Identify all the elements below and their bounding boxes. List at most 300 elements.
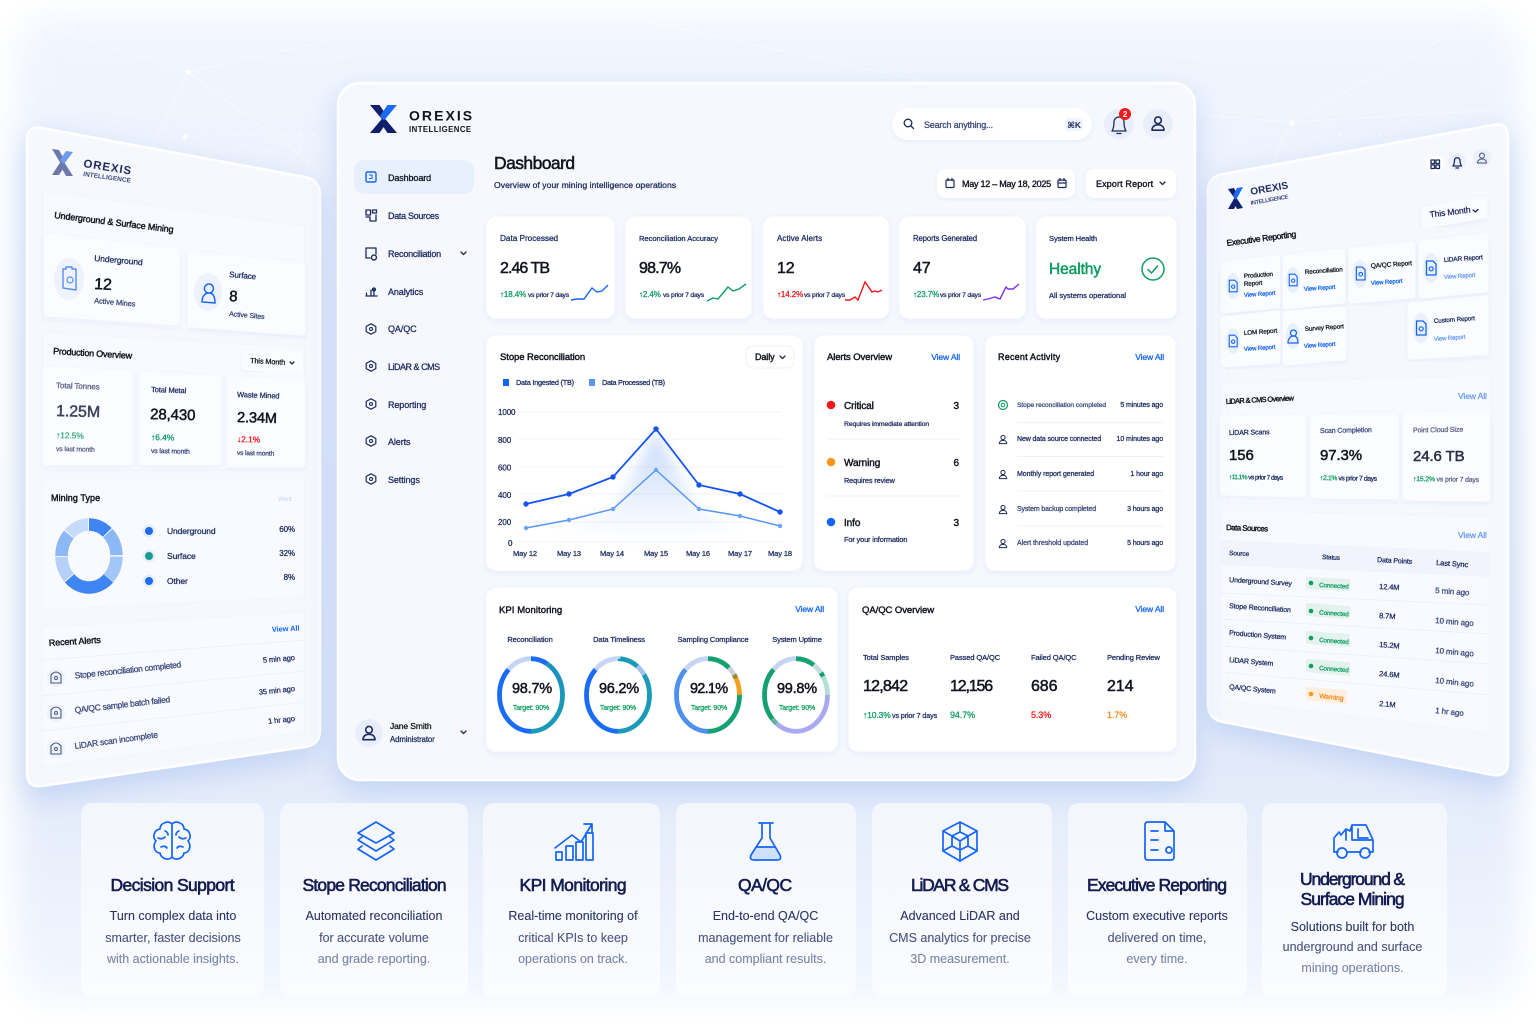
row: lidar system: 24.6M (1379, 669, 1400, 680)
logo (370, 105, 472, 134)
stat: lidar scans: ↑11.1% vs prior 7 days (1229, 474, 1284, 482)
row: lidar system (1229, 657, 1475, 689)
row: lidar system: Connected (1319, 665, 1349, 674)
feature card: executive reporting: delivered on time, (1108, 931, 1206, 945)
chart card: stope reconciliation: Stope Reconciliation (500, 352, 585, 363)
activity row: Alert threshold updated (1017, 540, 1088, 547)
alert: info: Info (844, 518, 861, 529)
stat: point cloud size (1406, 414, 1487, 498)
metric: pending: Pending Review (1107, 653, 1160, 662)
nav: reporting (366, 399, 426, 410)
report card: production: Report (1244, 280, 1263, 288)
section: lidar and cms overview: LiDAR & CMS Overview (1226, 393, 1295, 406)
x axis labels (513, 549, 792, 558)
report card: qa/qc: View Report (1371, 279, 1403, 287)
table header (1220, 540, 1490, 577)
stat: total tonnes: 1.25M (56, 403, 100, 421)
row: qa/qc system: 1 hr ago (1435, 706, 1465, 718)
card: underground: 12 (94, 276, 112, 294)
card: qa/qc overview: QA/QC Overview (862, 605, 934, 616)
feature card: executive reporting: Executive Reporting (1087, 875, 1227, 895)
stat: waste mined: Waste Mined (237, 390, 280, 400)
kpi card: data processed: vs prior 7 days (528, 292, 570, 299)
card: underground (47, 237, 176, 322)
table header: Data Points (1377, 557, 1413, 566)
activity row (999, 470, 1163, 479)
row: underground survey (1229, 577, 1470, 597)
metric: failed: 686 (1031, 678, 1058, 695)
row: underground survey: Underground Survey (1229, 577, 1293, 588)
alert row: qa/qc sample (47, 684, 295, 722)
feature card: qa/qc: QA/QC (738, 875, 792, 895)
report card: lidar (1422, 237, 1485, 295)
alert row: lidar scan: LiDAR scan incomplete (74, 729, 159, 751)
nav: dashboard active (354, 160, 474, 194)
right logo (1228, 180, 1289, 209)
ring: sampling compliance: Target: 90% (691, 705, 727, 712)
report card: reconciliation (1286, 252, 1343, 306)
feature card: underground and surface mining: underground and surface (1283, 940, 1422, 954)
stat: waste mined: vs last month (237, 450, 275, 458)
table header: Last Sync (1436, 558, 1469, 569)
feature card: kpi monitoring: critical KPIs to keep (518, 931, 628, 945)
icon: layers (358, 822, 394, 860)
right logo: OREXIS (1250, 180, 1289, 198)
feature card: lidar and cms: 3D measurement. (910, 952, 1010, 966)
row: underground survey: Connected (1319, 582, 1349, 591)
row: production system: 15.2M (1379, 640, 1400, 651)
kpi card: system health (1036, 216, 1177, 319)
card: underground: Active Mines (94, 296, 136, 309)
alert row: stope reconciliation: Stope reconciliation completed (74, 659, 182, 680)
nav: data sources: Data Sources (388, 211, 440, 221)
ring: reconciliation (500, 635, 562, 731)
line: data processed (524, 468, 782, 530)
kpi card: reconciliation accuracy (625, 216, 752, 319)
x axis labels: May 17 (728, 549, 752, 558)
ring: data timeliness (586, 635, 650, 731)
section: production overview: Production Overview (53, 346, 133, 361)
feature card: underground and surface mining: mining operations. (1301, 961, 1404, 975)
activity row (999, 435, 1163, 444)
activity row: 1 hour ago (1131, 471, 1163, 478)
alert: info: 3 (954, 518, 960, 529)
kpi card: data processed: Data Processed (500, 234, 559, 243)
search bar (892, 108, 1092, 140)
activity row: 5 minutes ago (1120, 402, 1163, 409)
alert: critical: Critical (844, 401, 874, 412)
kpi card: reports generated: vs prior 7 days (940, 292, 982, 299)
search bar: ⌘K (1067, 120, 1082, 130)
nav: reconciliation: Reconciliation (388, 249, 441, 259)
report card: qa/qc: QA/QC Report (1371, 260, 1412, 270)
feature card: qa/qc: and compliant results. (705, 952, 826, 966)
nav: reporting: Reporting (388, 400, 426, 410)
card: qa/qc overview (848, 587, 1177, 752)
metric: passed: Passed QA/QC (950, 653, 1001, 662)
feature card: stope reconciliation: Stope Reconciliation (302, 875, 446, 895)
row: production system: Connected (1319, 637, 1349, 646)
metric: total samples: 12,842 (863, 678, 908, 695)
row: stope reconciliation: Connected (1319, 610, 1349, 618)
alert: warning: Warning (844, 458, 880, 469)
x axis labels: May 15 (644, 549, 668, 558)
row: underground survey: 5 min ago (1435, 586, 1470, 597)
truck wheels (1337, 848, 1370, 858)
section: data sources table: Data Sources (1226, 523, 1268, 533)
ring: reconciliation: Reconciliation (507, 635, 553, 644)
notification bell (1104, 108, 1134, 139)
table header: Source (1229, 550, 1250, 558)
kpi card: active alerts: vs prior 7 days (804, 292, 846, 299)
feature card: qa/qc: management for reliable (698, 931, 833, 945)
metric: passed: 94.7% (950, 710, 975, 720)
nav: reconciliation (366, 248, 466, 260)
kpi card: data processed: ↑18.4% (500, 290, 526, 299)
ring: data timeliness: 96.2% (599, 681, 639, 697)
alert row: qa/qc sample: QA/QC sample batch failed (74, 694, 171, 715)
activity row: Stope reconciliation completed (1017, 402, 1106, 409)
y axis: 600 (498, 464, 512, 472)
card: kpi monitoring: KPI Monitoring (499, 605, 562, 616)
row: qa/qc system: 2.1M (1379, 699, 1396, 709)
feature card: lidar and cms: LiDAR & CMS (911, 875, 1009, 895)
row: qa/qc system (1229, 684, 1465, 718)
section: lidar and cms overview (1220, 375, 1491, 503)
feature card: underground and surface mining: Surface Mining (1300, 889, 1404, 909)
stat: scan completion (1314, 416, 1395, 496)
row: underground survey: 12.4M (1379, 582, 1400, 592)
icon: flask (750, 823, 781, 860)
alert row: lidar scan: 1 hr ago (268, 714, 295, 726)
alert: warning: 6 (954, 458, 960, 469)
row: lidar system: 10 min ago (1435, 676, 1475, 689)
subtitle: Overview of your mining intelligence operations (494, 180, 676, 190)
row: qa/qc system: QA/QC System (1229, 684, 1276, 695)
section: mining type: Went (278, 497, 292, 503)
stat: point cloud size: Point Cloud Size (1413, 427, 1463, 434)
report card: lom (1224, 314, 1278, 364)
kpi card: reports generated: ↑23.7% (913, 290, 939, 299)
kpi card: reconciliation accuracy: 98.7% (639, 260, 681, 277)
feature card: lidar and cms: Advanced LiDAR and (900, 909, 1020, 923)
row: stope reconciliation: 10 min ago (1435, 616, 1475, 628)
kpi card: data processed: 2.46 TB (500, 260, 550, 277)
daily dropdown (746, 346, 794, 368)
background network decoration (60, 20, 1500, 170)
left logo: INTELLIGENCE (83, 171, 132, 185)
activity row: Monthly report generated (1017, 471, 1094, 478)
logo: INTELLIGENCE (409, 125, 471, 134)
feature card: qa/qc: End-to-end QA/QC (713, 909, 818, 923)
activity row (999, 539, 1163, 548)
kpi card: reconciliation accuracy: Reconciliation Accuracy (639, 234, 718, 243)
report card: custom (1411, 299, 1485, 356)
row: production system (1229, 630, 1475, 658)
table header: Status (1322, 554, 1341, 562)
nav: settings (366, 474, 420, 485)
kpi card: active alerts (763, 216, 889, 319)
legend: surface (142, 549, 295, 562)
legend: other (142, 573, 295, 588)
card: kpi monitoring (486, 587, 838, 752)
this month dropdown (1425, 200, 1484, 225)
y axis: 0 (508, 539, 513, 548)
heading: executive reporting: Executive Reporting (1226, 229, 1297, 248)
icon: mining truck (1334, 825, 1373, 852)
stat: point cloud size: ↑15.2% vs prior 7 days (1413, 476, 1480, 484)
row: stope reconciliation (1229, 603, 1475, 628)
stat: total tonnes: Total Tonnes (56, 381, 100, 392)
report card: reconciliation: View Report (1304, 285, 1336, 293)
nav: qa/qc (366, 324, 417, 334)
top icons (1426, 149, 1491, 173)
kpi card: system health: Healthy (1049, 261, 1101, 278)
feature card: stope reconciliation (280, 803, 468, 998)
report card: lidar: View Report (1444, 273, 1476, 281)
report card: survey (1286, 310, 1344, 362)
card: surface: 8 (229, 288, 238, 305)
chart card: stope reconciliation (486, 335, 803, 571)
report card: custom: Custom Report (1434, 315, 1475, 325)
legend: Data Processed (TB) (602, 378, 665, 387)
section: lidar and cms overview: View All (1458, 391, 1487, 401)
alert row: qa/qc sample: 35 min ago (258, 684, 295, 697)
stat: total metal (142, 375, 218, 462)
activity row: 3 hours ago (1127, 506, 1163, 513)
feature card: stope reconciliation: for accurate volume (319, 931, 429, 945)
stat: scan completion: Scan Completion (1320, 427, 1372, 435)
metric: failed: Failed QA/QC (1031, 653, 1077, 662)
nav: lidar and cms (366, 361, 440, 372)
date range: May 12 – May 18, 2025 (962, 179, 1051, 189)
report card: production: View Report (1244, 291, 1276, 299)
stat: total metal: 28,430 (150, 406, 196, 424)
stat: scan completion: 97.3% (1320, 447, 1362, 464)
feature card: kpi monitoring (483, 803, 660, 998)
feature card: kpi monitoring: KPI Monitoring (520, 875, 626, 895)
stat: waste mined: ↓2.1% (237, 434, 261, 445)
legend: Data Ingested (TB) (516, 378, 574, 387)
metric: total samples: ↑10.3% (863, 710, 891, 720)
report card: lom: LOM Report (1244, 328, 1278, 337)
legend: surface: 32% (279, 549, 295, 558)
legend: surface: Surface (167, 551, 196, 561)
icon: bar chart with arrow (555, 824, 593, 860)
row: lidar system: LiDAR System (1229, 657, 1274, 668)
nav: analytics: Analytics (388, 287, 424, 297)
stat: waste mined (230, 380, 302, 464)
card: surface: Active Sites (229, 311, 265, 321)
metric: pending: 1.7% (1107, 710, 1127, 720)
legend: underground: 60% (279, 525, 295, 534)
legend: underground: Underground (167, 526, 216, 536)
report card: production: Production (1244, 271, 1274, 280)
y axis (498, 408, 516, 548)
activity row: System backup completed (1017, 506, 1096, 513)
report card: survey: Survey Report (1305, 323, 1344, 333)
report card: custom: View Report (1434, 335, 1466, 343)
donut chart (62, 524, 116, 588)
user profile: Jane Smith (390, 721, 432, 731)
this month dropdown: This Month (1429, 205, 1471, 219)
row: production system: 10 min ago (1435, 646, 1475, 658)
icon: wireframe cube (943, 822, 977, 861)
x axis labels: May 12 (513, 549, 537, 558)
section: production overview (43, 332, 305, 470)
section: underground and surface mining (43, 191, 305, 337)
left logo (52, 149, 132, 185)
panel: left mining overview (27, 128, 320, 786)
panel: right reporting (1208, 124, 1508, 775)
date range (937, 169, 1075, 198)
feature card: decision support: with actionable insights. (106, 952, 239, 966)
ring: system uptime: System Uptime (772, 635, 822, 644)
report card: lidar: LiDAR Report (1444, 254, 1483, 264)
feature card: lidar and cms (872, 803, 1052, 998)
feature card: decision support: Turn complex data into (110, 909, 236, 923)
x axis labels: May 14 (600, 549, 624, 558)
kpi card: active alerts: ↑14.2% (777, 290, 803, 299)
activity row: 10 minutes ago (1117, 436, 1163, 443)
legend: other: 8% (284, 573, 295, 582)
card: qa/qc overview: View All (1135, 604, 1164, 614)
activity row (998, 400, 1163, 410)
legend (503, 378, 665, 387)
section: recent alerts: View All (272, 624, 300, 634)
alert: info (827, 518, 960, 544)
stat: lidar scans (1223, 418, 1302, 494)
feature card: decision support: Decision Support (110, 875, 235, 895)
report card: reconciliation: Reconciliation (1305, 266, 1343, 276)
section: recent alerts (42, 612, 305, 767)
metric: pending (1107, 653, 1160, 720)
ring: data timeliness: Data Timeliness (593, 635, 645, 644)
right logo: INTELLIGENCE (1250, 194, 1289, 207)
nav: lidar and cms: LiDAR & CMS (388, 362, 440, 372)
feature card: executive reporting: Custom executive reports (1086, 909, 1228, 923)
section: mining type: Mining Type (51, 493, 100, 503)
metric: pending: 214 (1107, 678, 1134, 695)
nav: qa/qc: QA/QC (388, 324, 417, 334)
x axis labels: May 18 (768, 549, 792, 558)
feature card: decision support (81, 803, 264, 998)
nav: alerts (366, 436, 411, 447)
feature card: decision support: smarter, faster decisions (105, 931, 241, 945)
metric: total samples (863, 653, 938, 720)
kpi card: system health: System Health (1049, 234, 1097, 243)
kpi card: active alerts: Active Alerts (777, 234, 822, 243)
metric: passed: 12,156 (950, 678, 993, 695)
card: recent activity: Recent Activity (998, 352, 1061, 362)
alert: warning: Requires review (844, 476, 896, 485)
stat: scan completion: ↑2.1% vs prior 7 days (1320, 475, 1378, 483)
section: underground and surface mining: Underground & Surface Mining (54, 210, 174, 235)
kpi card: reconciliation accuracy: ↑2.4% (639, 290, 661, 299)
nav: data sources (366, 210, 440, 221)
nav: alerts: Alerts (388, 437, 411, 447)
feature card: stope reconciliation: Automated reconciliation (306, 909, 442, 923)
feature card: lidar and cms: CMS analytics for precise (889, 931, 1031, 945)
feature card: executive reporting: every time. (1126, 952, 1188, 966)
feature card: underground and surface mining: Solutions built for both (1291, 920, 1414, 934)
ring: data timeliness: Target: 90% (600, 705, 636, 712)
kpi card: reconciliation accuracy: vs prior 7 days (663, 292, 705, 299)
daily dropdown: Daily (755, 352, 775, 362)
alert: critical (827, 401, 960, 428)
row: stope reconciliation: Stope Reconciliation (1229, 603, 1291, 614)
section: data sources table: View All (1458, 530, 1487, 540)
feature card: underground and surface mining (1262, 803, 1447, 998)
panel: main dashboard (338, 83, 1195, 780)
metric: failed: 5.3% (1031, 710, 1051, 720)
stat: point cloud size: 24.6 TB (1413, 448, 1465, 465)
nav: dashboard active: Dashboard (388, 173, 431, 183)
alert row: stope reconciliation (47, 653, 295, 687)
y axis: 800 (498, 436, 512, 445)
ring: sampling compliance: 92.1% (690, 681, 728, 697)
y axis: 200 (498, 518, 512, 527)
feature card: kpi monitoring: Real-time monitoring of (508, 909, 638, 923)
line: data ingested (523, 426, 783, 515)
left logo: OREXIS (83, 158, 132, 178)
legend: underground (142, 524, 295, 538)
ring: reconciliation: Target: 90% (513, 705, 549, 712)
sidebar navigation (354, 160, 474, 485)
notification bell: 2 (1123, 110, 1128, 119)
stat: lidar scans: 156 (1229, 447, 1254, 464)
row: stope reconciliation: 8.7M (1379, 611, 1396, 621)
ring: sampling compliance: Sampling Compliance (677, 635, 749, 644)
kpi card: reports generated: Reports Generated (913, 234, 977, 243)
logo: OREXIS (409, 108, 472, 124)
section: data sources table (1220, 510, 1490, 733)
kpi card: active alerts: 12 (777, 260, 795, 277)
alert row: stope reconciliation: 5 min ago (262, 653, 295, 665)
search bar: Search anything... (924, 120, 993, 130)
metric: total samples: Total Samples (863, 653, 909, 662)
user profile (355, 719, 466, 747)
icon: report document (1145, 822, 1174, 860)
user profile: Administrator (390, 735, 435, 744)
alert: warning (827, 458, 960, 485)
stat: waste mined: 2.34M (237, 410, 277, 427)
activity row: 5 hours ago (1127, 540, 1163, 547)
x axis labels: May 16 (686, 549, 710, 558)
metric: passed (950, 653, 1001, 720)
ring: system uptime: 99.8% (777, 681, 817, 697)
report card: survey: View Report (1304, 342, 1336, 350)
card: alerts overview: View All (931, 352, 960, 362)
x axis labels: May 13 (557, 549, 581, 558)
metric: total samples: vs prior 7 days (892, 713, 938, 720)
stat: total metal: Total Metal (151, 385, 187, 395)
card: underground: Underground (94, 253, 143, 267)
card: alerts overview: Alerts Overview (827, 352, 892, 363)
chart area (560, 432, 740, 542)
alert row: lidar scan (47, 714, 295, 758)
stat: total metal: vs last month (151, 448, 190, 456)
card: alerts overview (814, 335, 974, 571)
section: recent alerts: Recent Alerts (49, 635, 102, 648)
nav: settings: Settings (388, 475, 420, 485)
export button (1086, 169, 1176, 198)
y axis: 400 (498, 491, 512, 500)
activity row (999, 505, 1163, 514)
feature card: qa/qc (676, 803, 856, 998)
ring: system uptime (764, 635, 828, 731)
stat: lidar scans: LiDAR Scans (1229, 429, 1270, 437)
